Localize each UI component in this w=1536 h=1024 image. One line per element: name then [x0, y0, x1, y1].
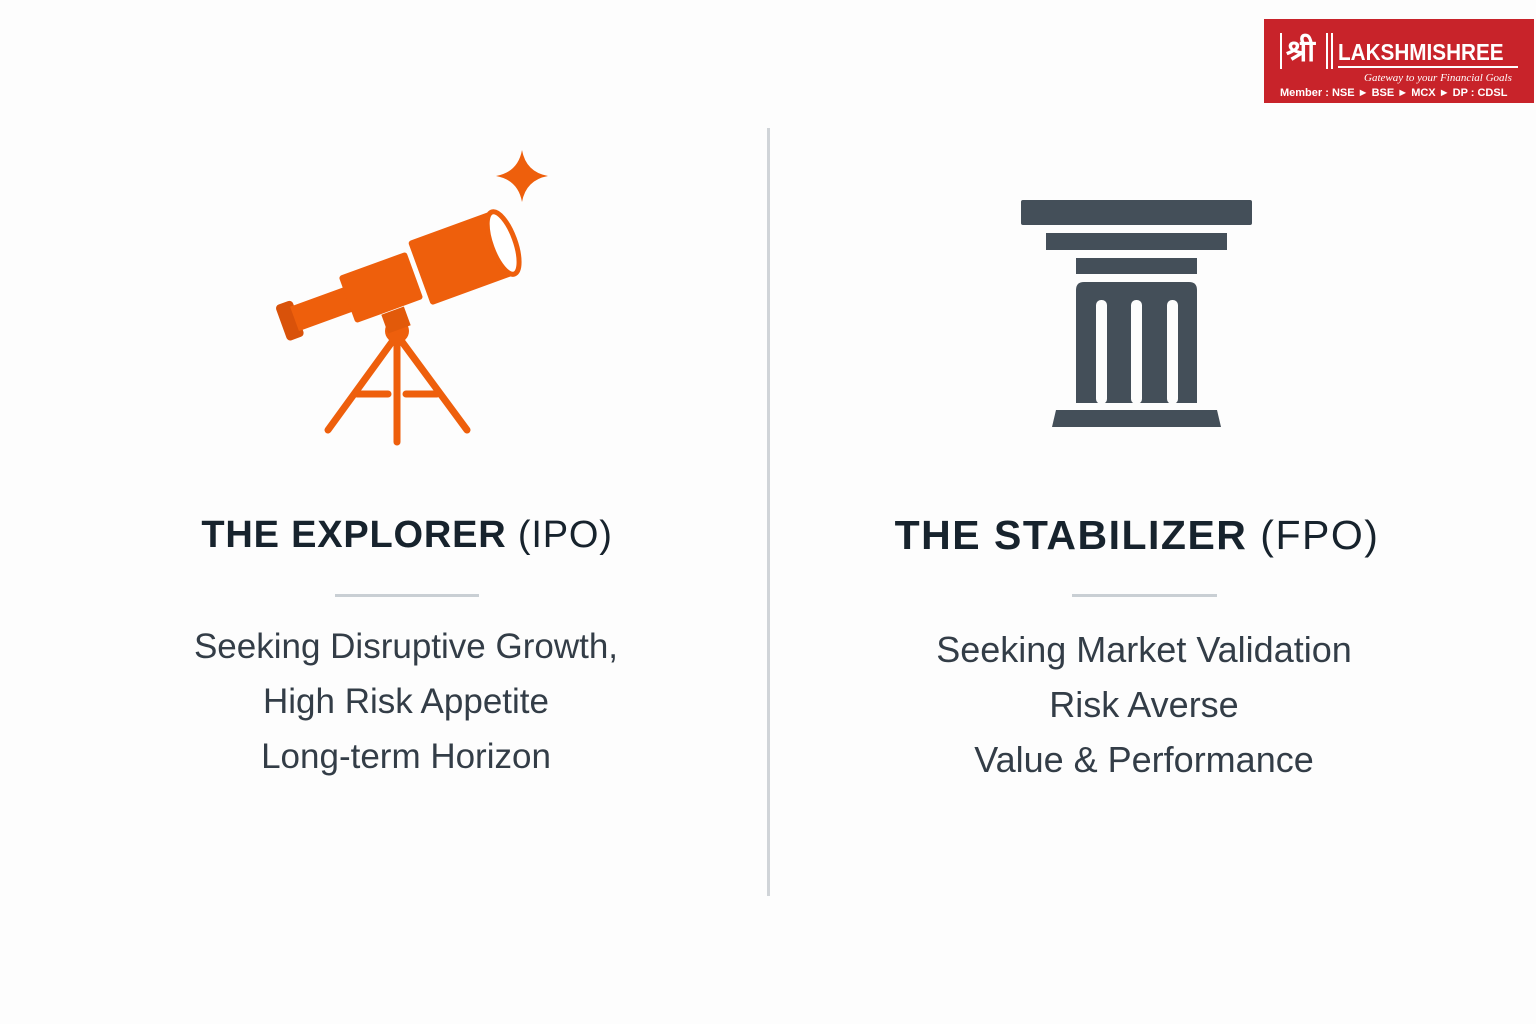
text: explorer traits	[194, 627, 618, 776]
heading: stabilizer: THE STABILIZER (FPO)	[895, 512, 1379, 558]
text: stabilizer traits: Value & Performance	[974, 739, 1314, 780]
icon: column	[1021, 200, 1252, 427]
heading: explorer: THE EXPLORER (IPO)	[201, 514, 613, 556]
icon: telescope	[276, 150, 548, 446]
logo: Gateway to your Financial Goals	[1364, 72, 1512, 84]
tripod	[328, 335, 467, 442]
text: stabilizer traits: Risk Averse	[1049, 684, 1239, 725]
logo: LAKSHMISHREE	[1338, 39, 1504, 65]
text: explorer traits: Long-term Horizon	[261, 737, 551, 776]
logo	[1264, 19, 1534, 103]
star	[496, 150, 548, 202]
text: explorer traits: High Risk Appetite	[263, 682, 549, 721]
logo: Member : NSE ► BSE ► MCX ► DP : CDSL	[1280, 87, 1507, 99]
logo: श्री	[1286, 35, 1315, 68]
text: stabilizer traits: Seeking Market Validation	[936, 629, 1352, 670]
text: explorer traits: Seeking Disruptive Growth,	[194, 627, 618, 666]
text: stabilizer traits	[936, 629, 1352, 780]
divider line	[767, 128, 770, 896]
